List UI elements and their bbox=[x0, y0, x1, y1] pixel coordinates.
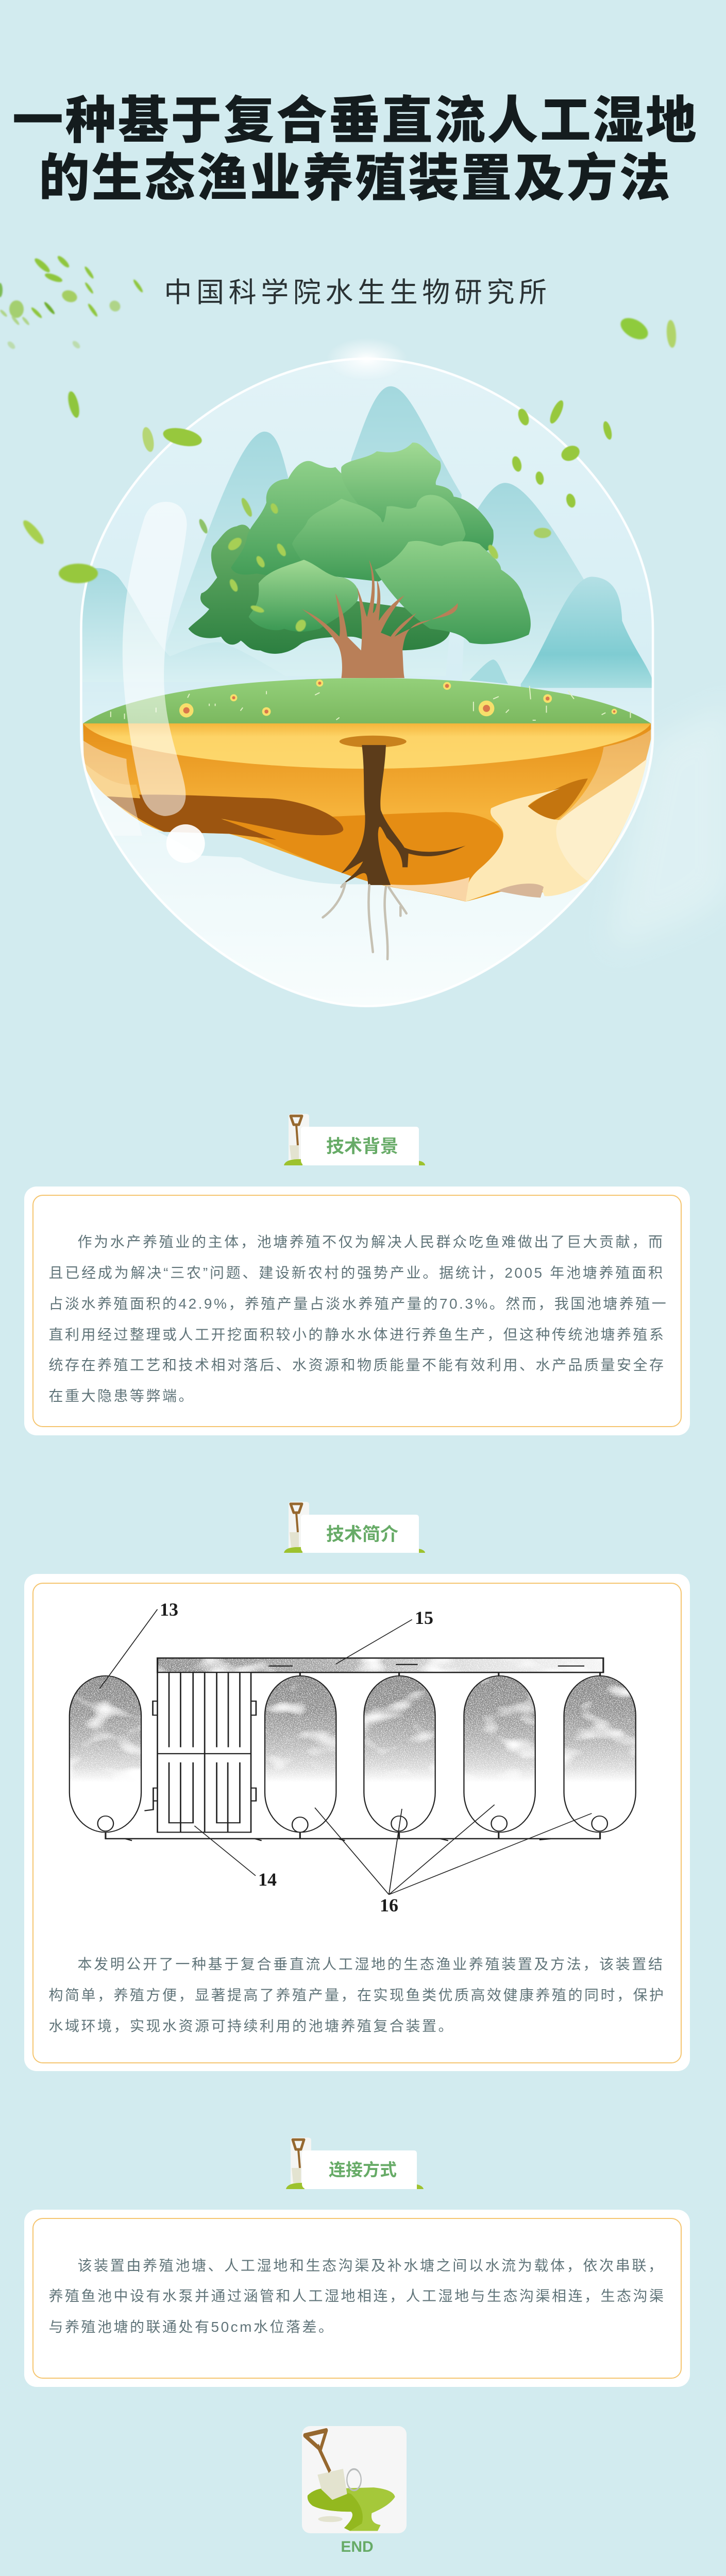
text block: connection: 养殖鱼池中设有水泵并通过涵管和人工湿地相连，人工湿地与生态沟渠相连，生态沟渠 bbox=[48, 2288, 666, 2304]
section label: 技术简介 bbox=[284, 1502, 425, 1553]
icon: shovel bbox=[284, 1114, 425, 1165]
section label: 技术简介: 技术简介 bbox=[326, 1524, 398, 1545]
section label: 技术背景: 技术背景 bbox=[326, 1137, 398, 1157]
tree bbox=[189, 443, 531, 678]
panel border bbox=[32, 1583, 682, 2063]
tree canopy: front right bbox=[375, 541, 531, 644]
title: 一种基于复合垂直流人工湿地 bbox=[12, 92, 698, 149]
mountains bbox=[81, 386, 655, 688]
text block: introduction bbox=[48, 1956, 666, 2034]
callout numbers: 14 bbox=[258, 1869, 277, 1890]
callout numbers: 13 bbox=[160, 1599, 178, 1620]
text block: introduction: 水域环境，实现水资源可持续利用的池塘养殖复合装置。 bbox=[48, 2018, 454, 2034]
white reflection stripe bbox=[123, 502, 187, 816]
icon: shovel bbox=[284, 1502, 425, 1553]
soft glow behind bubble bbox=[608, 696, 726, 953]
diagram: pond and wetland system bbox=[69, 1599, 636, 1916]
leaves on bubble edge bbox=[68, 392, 613, 538]
bubble rim bbox=[81, 359, 653, 1006]
text block: background: 在重大隐患等弊端。 bbox=[48, 1388, 195, 1404]
tree root bbox=[323, 736, 466, 959]
leaves inside bubble bbox=[197, 497, 500, 633]
title: 的生态渔业养殖装置及方法 bbox=[39, 149, 672, 207]
falling leaves bbox=[0, 144, 717, 583]
section label: 连接方式 bbox=[286, 2138, 424, 2189]
text block: background: 直利用经过整理或人工开挖面积较小的静水水体进行养鱼生产，但这种传统池塘养殖系 bbox=[48, 1327, 666, 1343]
icon: END shovel tile bbox=[302, 2426, 407, 2533]
tree canopy: upper left bbox=[231, 461, 359, 575]
tree canopy: front left bbox=[249, 560, 358, 632]
text block: connection: 与养殖池塘的联通处有50cm水位落差。 bbox=[48, 2319, 334, 2335]
section label: 连接方式: 连接方式 bbox=[329, 2160, 397, 2179]
tree trunk bbox=[302, 560, 458, 678]
icon: shovel bbox=[286, 2138, 424, 2189]
top channel bbox=[158, 1658, 603, 1672]
constructed wetland bbox=[144, 1672, 256, 1832]
glass bubble body bbox=[81, 359, 653, 1006]
text block: background bbox=[48, 1234, 668, 1404]
panel: background bbox=[24, 1187, 690, 1435]
reflection dot bbox=[166, 824, 205, 863]
text block: connection bbox=[48, 2258, 666, 2335]
panel border bbox=[32, 2218, 682, 2379]
END text: END bbox=[341, 2538, 374, 2555]
panel border bbox=[32, 1195, 682, 1427]
top sparkle on bubble bbox=[326, 337, 408, 381]
tree canopy: centre bbox=[292, 495, 466, 582]
text block: introduction: 构简单，养殖方便，显著提高了养殖产量，在实现鱼类优质高效健康养殖的同时，保护 bbox=[48, 1987, 666, 2003]
title bbox=[12, 92, 698, 207]
leader lines bbox=[99, 1609, 592, 1894]
tree canopy: upper right bbox=[341, 443, 494, 558]
subtitle: institute: 中国科学院水生生物研究所 bbox=[164, 277, 551, 308]
text block: introduction: 本发明公开了一种基于复合垂直流人工湿地的生态渔业养殖装置及方法，该装置结 bbox=[77, 1956, 665, 1972]
island soil bbox=[81, 723, 653, 902]
tree canopy: back layer bbox=[189, 524, 450, 654]
text block: connection: 该装置由养殖池塘、人工湿地和生态沟渠及补水塘之间以水流为载体，依次串联， bbox=[77, 2258, 665, 2274]
text block: background: 统存在养殖工艺和技术相对落后、水资源和物质能量不能有效利用、水产品质量安全存 bbox=[48, 1357, 666, 1373]
callout numbers: 15 bbox=[415, 1607, 433, 1628]
hero illustration: tree in glass bubble bbox=[0, 255, 724, 1008]
text block: background: 且已经成为解决“三农”问题、建设新农村的强势产业。据统计，2005 年池塘养殖面积 bbox=[48, 1265, 665, 1281]
text block: background: 作为水产养殖业的主体，池塘养殖不仅为解决人民群众吃鱼难做出了巨大贡献，而 bbox=[77, 1234, 665, 1250]
blue water wave under island bbox=[157, 830, 367, 884]
panel: connection bbox=[24, 2210, 690, 2387]
panel: introduction bbox=[24, 1574, 690, 2071]
section label: 技术背景 bbox=[284, 1114, 425, 1165]
callout numbers: 16 bbox=[380, 1895, 398, 1916]
return pipe and valves bbox=[98, 1665, 607, 1841]
text block: background: 占淡水养殖面积的42.9%，养殖产量占淡水养殖产量的70.3%。然而，我国池塘养殖一 bbox=[48, 1296, 668, 1312]
pond tanks bbox=[70, 1676, 636, 1832]
grass top with flowers bbox=[83, 678, 651, 723]
callout numbers bbox=[160, 1599, 433, 1916]
